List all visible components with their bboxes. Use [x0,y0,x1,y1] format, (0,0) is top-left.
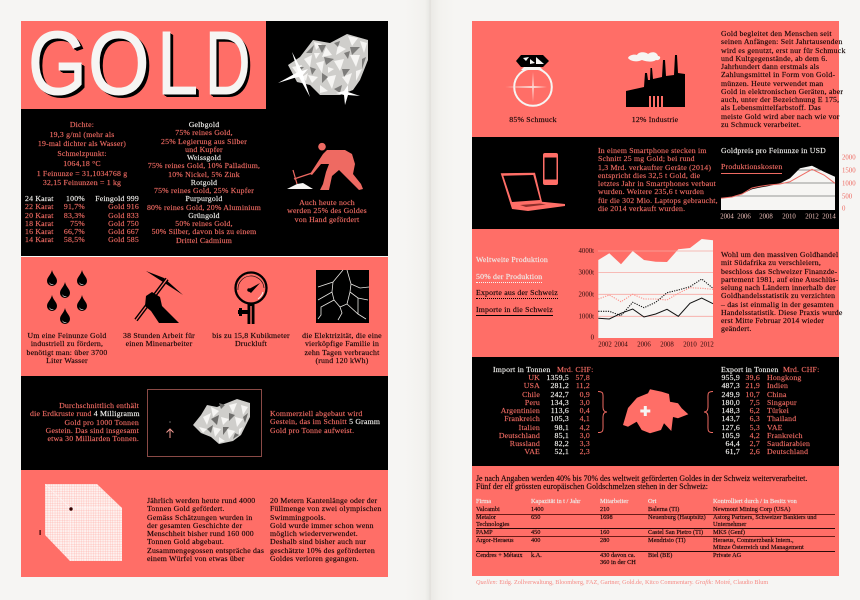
table: imports: 82,2 [555,439,569,448]
legend: production cost [721,163,782,174]
title: G [28,14,87,114]
chart: gold price: 2000 [842,154,856,162]
text: intro [720,29,846,129]
text: commercial mining: Kommerziell abgebaut wird [270,409,362,418]
table: imports: Russland [510,439,540,448]
chart: production, imports, exports: 4000t [579,248,594,255]
table: refineries: 1400 [531,506,544,513]
text: electricity [302,331,382,365]
table: exports: Mrd. CHF: [783,365,819,374]
icon: right brace [704,391,713,433]
table: exports: 6,2 [750,406,760,415]
chart: gold price: 2004 [720,214,734,220]
text: water: Um eine Feinunze Gold [28,331,106,340]
text: gold alloys: 75% reines Gold, [175,128,233,137]
text: density and melting point: 19,3 g/ml (mehr als [50,130,114,139]
text: earth crust: die Erdkruste rund 4 Milligramm [30,409,140,418]
table: imports: 3,0 [580,431,590,440]
table: karat: 100% [66,194,85,203]
text: annual production col 2: Swimmingpools. [270,513,326,522]
table: refineries [476,498,835,566]
table: imports: Italien [519,423,540,432]
table: refineries: 160 [600,529,609,536]
legend: production chart [476,255,558,316]
text: compressed air: bis zu 15,8 Kubikmeter [212,331,290,340]
icon: grid cube [40,484,122,561]
text: earth crust: Gold pro 1000 Tonnen [64,418,139,427]
table: exports: 955,9 [721,373,740,382]
title: D [205,14,250,114]
icon: laptop [500,172,565,211]
table: refineries: Kapazität in t / Jahr [531,498,580,505]
icon: pressure gauge [234,271,268,324]
text: work hours [123,331,195,348]
table: refineries: Castel San Pietro (TI) [648,529,703,536]
legend: production cost: Produktionskosten [721,162,782,171]
text: jewellery share: 85% Schmuck [509,115,557,124]
text: smartphones: für die 302 Mio. Laptops gebraucht, [598,196,718,205]
table: refineries: Mitarbeiter [600,498,628,505]
panel: import and export [472,357,839,466]
table: refineries: Biel (BE) [648,552,672,559]
table: exports: 249,9 [721,390,740,399]
icon: miner with pickaxe [287,142,363,190]
table: imports: 4,1 [580,414,590,423]
table: exports: 148,3 [721,406,740,415]
text: annual production col 2: Goldes verloren gegangen. [270,554,359,563]
table: imports: USA [524,381,540,390]
panel: refineries [472,466,839,576]
text: intro: Gold in elektronischen Geräten, aber [721,87,843,96]
text: trade statistics [720,250,843,333]
text: commercial mining: Gestein, das im Schnitt 5 Gramm [270,417,380,426]
icon: smartphone [543,153,558,185]
table: karat: Gold 667 [108,227,139,236]
text: electricity: (rund 120 kWh) [315,356,369,365]
text: annual production col 1: der gesamten Geschichte der [147,521,242,530]
table: imports: UK [528,373,540,382]
text: trade statistics: geändert. [721,324,752,333]
text: miner caption: Auch heute noch [299,198,355,207]
text: density and melting point: 19-mal dichter als Wasser) [38,139,126,148]
chart: production, imports, exports: 2010 [683,342,697,348]
table: exports: 21,9 [746,381,760,390]
text: annual production col 2: Deshalb sind bisher auch nur [270,537,366,546]
table: exports: Saudiarabien [767,439,810,448]
text: gold alloys: 10% Nickel, 5% Zink [168,170,240,179]
text: water: Liter Wasser [46,356,88,365]
chart: production, imports, exports: 3000t [579,270,594,276]
table: refineries: 450 [531,529,540,536]
text: intro: wird es genutzt, erst nur für Schmuck [721,46,846,55]
text: intro: Zahlungsmittel in Form von Gold- [721,70,835,79]
text: earth crust [30,401,140,443]
table: karat: 22 Karat [25,202,54,211]
table: imports: 3,3 [580,439,590,448]
chart: gold price: 2010 [782,214,796,220]
panel: production and trade [472,229,839,357]
panel: requirements per ounce [21,257,388,376]
text: smartphones: letztes Jahr in Smartphones verbaut [598,179,716,188]
table: karat: Feingold 999 [95,194,139,203]
table: karat [25,194,139,244]
table: refineries: k.A. [531,552,542,559]
icon: tiny speck and arrow [166,422,174,438]
table: refineries: Astorg Partners, Schweizer Bankiers und [713,514,817,521]
table: imports: Mrd. CHF: [557,365,593,374]
chart: gold price: 1000 [842,180,856,188]
table: refineries: Newmont Mining Corp (USA) [713,506,790,513]
text: annual production col 1: einem Würfel von etwas über [147,554,244,563]
text: smartphones: wurden. Weitere 235,6 t wurden [598,187,704,196]
table: imports: 3,0 [580,398,590,407]
text: refineries intro: Fünf der elf grössten europäischen Goldschmelzen stehen in der Schweiz: [476,482,708,491]
table: exports: 180,0 [721,398,740,407]
table: exports: 64,4 [726,439,740,448]
legend: production chart: Importe in die Schweiz [476,305,553,314]
table: refineries: Mendrisio (TI) [648,537,686,544]
table: exports: Türkei [767,406,789,415]
table: karat: Gold 833 [108,211,139,220]
table: refineries: Unternehmer [713,520,746,528]
title: O [88,14,150,114]
table: refineries: Ort [648,498,656,505]
text: density and melting point: Schmelzpunkt: [57,149,107,158]
chart: gold price: 2014 [822,214,836,220]
icon: pickaxe in hand [134,271,183,323]
text: gold alloys: und Kupfer [185,145,223,154]
table: refineries: Metalor [476,514,496,521]
chart: production, imports, exports: 2008 [660,342,674,348]
text: density and melting point [37,120,128,187]
table: exports: Indien [767,381,788,390]
table: exports: Frankreich [767,431,803,440]
text: intro: meiste Gold wird aber nach wie vor [721,112,840,121]
text: trade statistics: – das ist einmalig in der gesamten [721,300,834,309]
text: intro: Jahrhundert dann erstmals als [721,62,819,71]
title: L [157,14,198,114]
text: smartphones: In einem Smartphone stecken im [598,146,707,155]
table: refineries: Cendres + Métaux [476,552,523,559]
text: trade statistics: Goldhandelsstatistik zu verzichten [721,291,835,300]
legend: production chart: 50% der Produktion [476,272,542,281]
table: karat: 91,7% [64,202,85,211]
text: annual production col 1: Zusammengegossen entspräche das [147,546,264,555]
text: annual production col 1 [147,496,264,563]
table: exports: 5,3 [750,423,760,432]
text: annual production col 1: Jährlich werden heute rund 4000 [147,496,255,505]
text: electricity: zehn Tagen verbraucht [305,348,379,357]
table: imports: 134,3 [550,398,569,407]
icon: gold nugget with sparkles [278,34,368,105]
panel: total gold volume [21,470,388,577]
text: smartphones: 1,3 Mrd. verkaufter Geräte (2014) [598,163,711,172]
table: refineries: Heraeus, Commerzbank Intern., [713,537,794,544]
table: imports: 4,2 [580,423,590,432]
text: smartphones: die 2014 verkauft wurden. [598,204,685,213]
legend: production chart: Exporte aus der Schweiz [476,288,558,297]
table: karat: Gold 750 [108,219,139,228]
table: exports: 6,3 [750,414,760,423]
table: imports: VAE [524,447,540,456]
text: refineries intro [476,474,807,492]
panel: electronics and price [472,137,839,229]
table: imports: 0,9 [580,390,590,399]
icon: diamond ring [506,55,553,107]
text: refineries intro: Je nach Angaben werden 40% bis 70% des weltweit geförderten Goldes in der Schweiz weiterverarbeitet. [476,474,807,483]
table: imports: 85,1 [555,431,569,440]
table: imports: 57,8 [576,373,590,382]
table: karat: 16 Karat [25,227,54,236]
table: karat: 58,5% [64,235,85,244]
text: trade statistics: Handelsstatistik. Diese Praxis wurde [721,308,843,317]
table: refineries: 360 in der CH [600,558,636,566]
text: electricity: die Elektrizität, die eine [302,331,382,340]
table: imports: Frankreich [504,414,540,423]
table: exports: 7,5 [750,398,760,407]
text: smartphones: entspricht dies 32,5 t Gold, die [598,171,700,180]
text: gold alloys: 75% reines Gold, 25% Kupfer [154,186,254,195]
table: imports: 0,4 [580,406,590,415]
table: imports: 11,2 [576,381,590,390]
icon: Switzerland map with cross [623,389,688,434]
text: gold alloys [147,120,261,245]
text: annual production col 1: Gemäss Schätzungen wurden in [147,513,252,522]
text: commercial mining [270,409,380,435]
text: water: benötigt man: über 3700 [26,348,108,357]
text: intro: zu Schmuck verarbeitet. [721,120,801,129]
table: imports: Deutschland [499,431,540,440]
table: exports: 39,6 [746,373,760,382]
table: exports: 105,9 [721,431,740,440]
text: gold alloys: Drittel Cadmium [176,236,232,245]
text: intro: münzen. Heute verwendet man [721,79,823,88]
text: trade statistics: beschloss das Schweizer Finanzde- [721,267,837,276]
text: annual production col 1: Tonnen Gold gefördert. [147,504,225,513]
table: karat: 83,3% [64,211,85,220]
table: imports: Argentinien [501,406,540,415]
table: exports: 4,2 [750,431,760,440]
table: karat: 24 Karat [25,194,54,203]
text: intro: auch, unter der Bezeichnung E 175, [721,95,839,104]
chart: gold price: 1500 [842,168,856,174]
text: earth crust: Durchschnittlich enthält [59,401,139,410]
text: miner caption: von Hand gefördert [295,215,359,224]
text: miner caption: werden 25% des Goldes [287,206,367,215]
text: annual production col 1: Tonnen Gold abgebaut. [147,537,224,546]
table: exports: 2,6 [750,447,760,456]
text: trade statistics: Wohl um den massiven Goldhandel [721,250,838,259]
table: exports: 10,7 [746,390,760,399]
chart: gold price: 0 [842,206,846,212]
icon: gold nugget small [193,399,250,444]
table: imports: 52,1 [555,447,569,456]
table: exports: VAE [767,423,783,432]
text: electricity: vierköpfige Familie in [305,339,379,348]
text: compressed air: Druckluft [235,339,267,348]
text: commercial mining: Gold pro Tonne aufweist. [270,426,354,435]
text: sources: Quellen: Eidg. Zollverwaltung, Bloomberg, FAZ, Gartner, Gold.de, Kitco Commentary. Grafik: Moiré, Claudio Blum [476,579,768,586]
chart: production, imports, exports: 2002 [598,342,612,348]
table: exports: Hongkong [767,373,802,382]
table: refineries: 430 davon ca. [600,552,635,559]
chart: production, imports, exports: 2000t [579,292,594,298]
text: gold alloys: Rotgold [191,178,217,187]
text: density and melting point: Dichte: [70,120,94,129]
legend: production chart: Weltweite Produktion [476,255,548,264]
table: refineries: Münze Österreich und Management [713,544,804,550]
table: refineries: Private AG [713,552,741,559]
table: exports: 127,6 [721,423,740,432]
frame: scale comparison [147,389,262,457]
chart: gold price: 2012 [805,214,819,220]
table: karat: 14 Karat [25,235,54,244]
text: trade statistics: erst Mitte Februar 2014 wieder [721,316,824,325]
text: water: industriell zu fördern, [31,339,103,348]
text: earth crust: Gestein. Das sind insgesamt [46,426,139,435]
table: refineries: 400 [531,537,540,544]
table: refineries: MKS (Genf) [713,529,745,536]
chart: production, imports, exports: 2006 [637,342,651,348]
table: refineries: PAMP [476,529,493,536]
text: work hours: einen Minenarbeiter [126,339,192,348]
table: exports: Thailand [767,414,796,423]
table: refineries: Kontrolliert durch / in Besitz von [713,498,797,505]
table: karat: 66,7% [64,227,85,236]
table: exports: 143,7 [721,414,740,423]
text: trade statistics: partement 1981, auf eine Auschlüs- [721,275,838,284]
chart: gold price: 2008 [759,214,773,220]
text: smartphones [598,146,718,213]
table: imports [493,365,593,456]
table: karat: 18 Karat [25,219,54,228]
table: imports: 242,7 [550,390,569,399]
table: imports: 98,1 [555,423,569,432]
text: gold alloys: 25% Legierung aus Silber [161,137,247,146]
text: annual production col 1: Menschheit bisher rund 160 000 [147,529,254,538]
icon: factory [626,52,685,107]
text: smartphones: Schnitt 25 mg Gold; bei rund [598,154,695,163]
text: density and melting point: 1 Feinunze = 31,1034768 g [37,169,127,178]
panel: title and properties background [21,21,388,256]
icon: water drops [47,270,87,324]
text: water [26,331,108,365]
table: refineries: Valcambi [476,506,500,513]
table: exports: Singapur [767,398,797,407]
text: trade statistics: selung nach Ländern innerhalb der [721,283,836,292]
table: refineries: Technologies [476,520,509,528]
text: gold alloys: 50% reines Gold, [175,219,233,228]
table: exports: 487,3 [721,381,740,390]
table: exports: 61,7 [726,447,740,456]
text: miner caption [287,198,367,224]
chart: production, imports, exports: 0 [591,334,595,342]
text: intro: und Kultgegenstände, ab dem 6. [721,54,827,63]
chart: gold price: 500 [842,194,853,200]
table: karat: Gold 585 [108,235,139,244]
heading: gold price: Goldpreis pro Feinunze in USD [721,146,826,155]
table: exports: China [767,390,787,399]
text: gold alloys: Weissgold [187,153,221,162]
table: refineries: Argor-Heraeus [476,537,514,544]
text: density and melting point: 1064,18 °C [63,159,101,168]
title [28,14,250,114]
table: refineries: Balerna (TI) [648,506,679,513]
table: imports: Import in Tonnen [493,365,551,374]
table: imports: 1359,5 [546,373,569,382]
text: earth crust: etwa 30 Milliarden Tonnen. [47,434,139,443]
text: work hours: 38 Stunden Arbeit für [123,331,195,340]
chart: production, imports, exports: 1000t [579,314,594,320]
chart: production, imports, exports: 2004 [614,342,628,348]
table: imports: 105,3 [550,414,569,423]
chart: gold price [720,154,856,220]
text: intro: seinen Anfängen: Seit Jahrtausenden [721,37,843,46]
text: intro: Gold begleitet den Menschen seit [721,29,832,38]
text: intro: als Lebensmittelfarbstoff. Das [721,103,821,112]
table: karat: Gold 916 [108,202,139,211]
text: industry share: 12% Industrie [632,115,678,124]
text: gold alloys: Purpurgold [186,194,222,203]
table: refineries: 650 [531,514,540,521]
text: annual production col 2: Gold wurde immer schon wenn [270,521,374,530]
table: exports: 2,7 [750,439,760,448]
table: exports: Export in Tonnen [721,365,779,374]
panel: uses [472,21,839,137]
text: gold alloys: 50% Silber, davon bis zu einem [152,227,256,236]
table: refineries: Neuenburg (Hauptsitz) [648,514,706,521]
table: imports: 113,6 [551,406,569,415]
icon: lightning cracks [316,270,369,323]
table: refineries: 280 [600,537,609,544]
table: exports: Deutschland [767,447,808,456]
table: imports: 2,3 [580,447,590,456]
table: refineries: 210 [600,506,609,513]
text: annual production col 2: Füllmenge von zwei olympischen [270,504,381,513]
table: karat: 75% [70,219,85,228]
text: annual production col 2: 20 Metern Kantenlänge oder der [270,496,377,505]
text: gold alloys: 80% reines Gold, 20% Aluminium [147,203,261,212]
table: imports: Peru [525,398,540,407]
text: annual production col 2: möglich wiederverwendet. [270,529,358,538]
panel: gold in earth crust [21,376,388,470]
table: imports: 281,2 [550,381,569,390]
text: gold alloys: Gelbgold [189,120,219,129]
table: refineries: 1698 [600,514,613,521]
text: annual production col 2: geschätzte 10% des geförderten [270,546,375,555]
chart: gold price: 2006 [737,214,751,220]
table: karat: 20 Karat [25,211,54,220]
text: compressed air [212,331,290,348]
text: density and melting point: 32,15 Feinunzen = 1 kg [43,178,121,187]
text: gold alloys: 75% reines Gold, 10% Palladium, [148,161,260,170]
text: annual production col 2 [270,496,382,563]
table: imports: Chile [522,390,540,399]
table: exports [721,365,819,456]
text: trade statistics: mit Südafrika zu verschleiern, [721,258,821,267]
chart: production, imports, exports [578,239,714,348]
icon: left brace [598,391,607,433]
text: gold alloys: Grüngold [188,211,220,220]
chart: production, imports, exports: 2012 [700,342,714,348]
panel: title background [21,21,266,109]
table: refineries: Firma [476,498,491,505]
